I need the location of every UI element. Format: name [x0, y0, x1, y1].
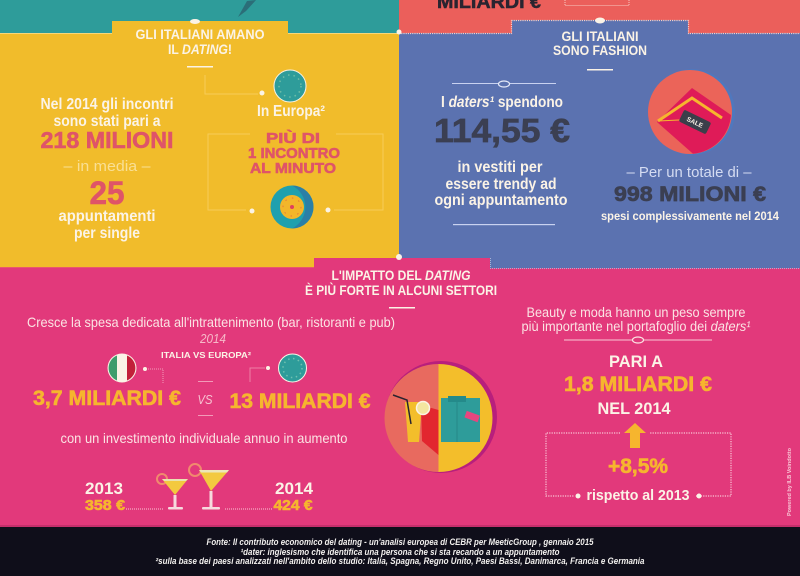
text: beauty e moda: più importante nel portafoglio dei daters¹: [522, 319, 751, 334]
divider with knot: [564, 337, 712, 343]
text: cresce la spesa: ITALIA VS EUROPA²: [161, 350, 251, 360]
text block: per un totale di: – Per un totale di –: [626, 164, 752, 181]
footer: sources: [0, 527, 800, 576]
text block: incontri 2014: 218 MILIONI: [40, 127, 174, 153]
credit: powered by: Powered by ILB Voindotto: [787, 448, 793, 516]
heading: gli italiani amano: [136, 27, 264, 68]
text block: daters spendono: [434, 94, 570, 209]
heading: gli italiani amano: GLI ITALIANI AMANO: [136, 27, 264, 42]
text block: daters spendono: ogni appuntamento: [434, 192, 568, 209]
icon: drink and shirt pie: [385, 361, 497, 473]
icon: italian flag: [108, 354, 136, 382]
dots: clock connectors: [250, 208, 330, 214]
heading: impatto del dating: È PIÙ FORTE IN ALCUNI SETTORI: [305, 283, 497, 298]
icon: europe globe: [274, 70, 306, 102]
text: più di 1 incontro al minuto: AL MINUTO: [250, 160, 336, 177]
stat: 1,8 miliardi: [564, 353, 712, 418]
stat: 2014: 2014: [275, 479, 314, 498]
stat: 2014: 424 €: [274, 497, 313, 514]
stat: 1,8 miliardi: PARI A: [609, 353, 663, 371]
heading: sono fashion: [553, 29, 647, 70]
connector: italy: [143, 367, 163, 384]
text block: incontri 2014: Nel 2014 gli incontri: [40, 96, 174, 113]
text block: incontri 2014: [40, 96, 174, 242]
connector: europa line: [205, 75, 264, 96]
text: cresce la spesa: 2014: [199, 331, 226, 346]
icon: clock: [270, 186, 314, 228]
comparison: italia vs europa: [33, 381, 371, 416]
text: investimento individuale: con un investimento individuale annuo in aumento: [60, 430, 348, 446]
panel: impatto del dating: [0, 258, 800, 527]
text: in europa: In Europa²: [257, 103, 325, 120]
text block: incontri 2014: sono stati pari a: [54, 113, 161, 130]
text block: per un totale di: 998 MILIONI €: [614, 183, 766, 206]
stat: 2014: [225, 479, 314, 514]
heading: sono fashion: SONO FASHION: [553, 43, 647, 58]
box: dotted frame: [546, 433, 731, 496]
stat: 2013: [85, 479, 163, 514]
text block: daters spendono: essere trendy ad: [446, 176, 556, 193]
text: più di 1 incontro al minuto: PIÙ DI: [266, 129, 320, 147]
footer: sources: ¹dater: inglesismo che identifica una persona che si sta recando a un appuntamento: [240, 547, 560, 557]
stat: 1,8 miliardi: NEL 2014: [598, 400, 671, 418]
panel: gli italiani amano il dating: [0, 21, 399, 269]
stat: 2013: 358 €: [85, 497, 126, 514]
stat: 2013: 2013: [85, 479, 123, 498]
text: cresce la spesa: [27, 314, 395, 360]
text: cresce la spesa: Cresce la spesa dedicata all'intrattenimento (bar, ristoranti e pub): [27, 314, 395, 330]
heading: gli italiani amano: IL DATING!: [168, 42, 232, 57]
comparison: italia vs europa: 13 MILIARDI €: [230, 390, 371, 413]
panel: gli italiani sono fashion: [399, 20, 800, 268]
heading: sono fashion: GLI ITALIANI: [562, 29, 638, 44]
comparison: italia vs europa: 3,7 MILIARDI €: [33, 387, 181, 410]
text block: daters spendono: in vestiti per: [458, 159, 542, 176]
frame: dotted box around minute: [208, 134, 383, 210]
footer: sources: Fonte: Il contributo economico del dating - un'analisi europea di CEBR per MeeticGroup , gennaio 2015: [206, 537, 594, 547]
arrow: up: [624, 423, 646, 448]
text: rispetto al 2013: rispetto al 2013: [586, 488, 690, 504]
text: più di 1 incontro al minuto: 1 INCONTRO: [248, 145, 340, 162]
heading: impatto del dating: [305, 268, 497, 308]
stat: +8,5%: +8,5%: [608, 455, 668, 478]
icon: small cocktail: [157, 474, 188, 510]
text block: incontri 2014: appuntamenti: [58, 208, 156, 225]
divider with knot: [452, 81, 556, 87]
connector: europe: [250, 366, 270, 382]
text block: per un totale di: [601, 164, 780, 223]
text block: incontri 2014: per single: [74, 225, 140, 242]
icon: clothes hanger with sale tag: SALE: [685, 116, 704, 130]
text block: daters spendono: I daters¹ spendono: [441, 94, 563, 111]
text block: incontri 2014: 25: [90, 175, 124, 211]
footer: sources: ²sulla base dei paesi analizzati nell'ambito dello studio: Italia, Spagna, Regno Unito, Paesi Bassi, Danimarca, Francia e Germania: [156, 556, 645, 566]
icon: large cocktail: [189, 464, 229, 510]
text: beauty e moda: Beauty e moda hanno un peso sempre: [526, 305, 746, 320]
text block: incontri 2014: – in media –: [64, 158, 151, 175]
decorations: hearts and dots: [190, 18, 605, 260]
stat: 1,8 miliardi: 1,8 MILIARDI €: [564, 373, 712, 396]
comparison: italia vs europa: VS: [198, 392, 213, 407]
text: beauty e moda: [522, 305, 751, 334]
icon: clothes hanger with sale tag: [648, 69, 735, 155]
icon: europe globe small: [278, 354, 306, 382]
text block: per un totale di: spesi complessivamente nel 2014: [601, 211, 780, 223]
heading: impatto del dating: L'IMPATTO DEL DATING: [332, 268, 471, 283]
text block: daters spendono: 114,55 €: [434, 112, 570, 149]
top strip: previous section remnants: [0, 0, 800, 34]
text: più di 1 incontro al minuto: [248, 129, 340, 177]
